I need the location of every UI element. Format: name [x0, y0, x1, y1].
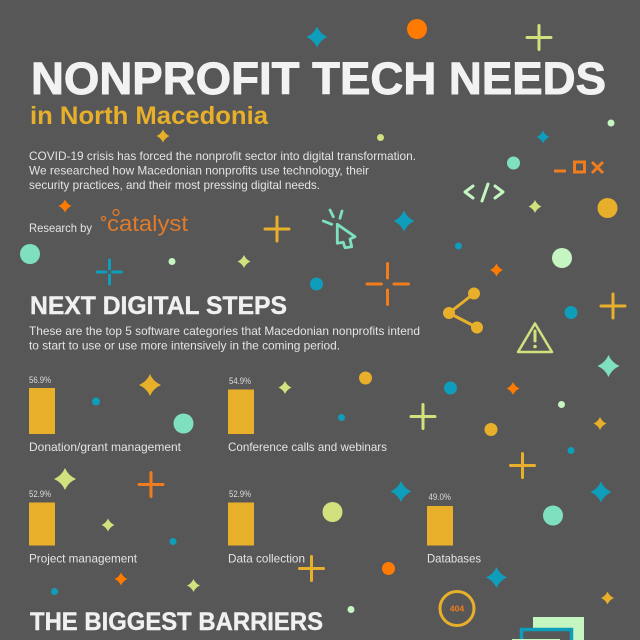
bar: project management: Project management: [29, 552, 138, 566]
icon: 404 badge: 404: [450, 604, 464, 614]
title: NONPROFIT TECH NEEDS: [31, 53, 606, 104]
bar: project management: [29, 489, 138, 566]
icon: browser windows: [512, 617, 584, 640]
bar: conference calls and webinars: 54.9%: [229, 376, 251, 386]
intro text: COVID-19 crisis has forced the nonprofit sector into digital transformation.: [29, 149, 416, 163]
intro text: security practices, and their most pressing digital needs.: [29, 178, 320, 192]
decorative plus crosses: [97, 26, 625, 580]
icon: window controls: [554, 162, 603, 173]
bar: conference calls and webinars: Conference calls and webinars: [228, 440, 387, 454]
bar: donation/grant management: 56.9%: [29, 375, 51, 385]
heading: the biggest barriers: THE BIGGEST BARRIERS: [30, 608, 323, 636]
icon: share: [444, 288, 482, 333]
logo: catalyst: catalyst: [107, 211, 188, 236]
decorative four-point stars: [54, 26, 620, 604]
bar: donation/grant management: [29, 375, 182, 454]
bar: databases: Databases: [427, 552, 481, 566]
bar chart: [29, 375, 481, 566]
bar: data collection: 52.9%: [229, 489, 251, 499]
icon: warning triangle: [518, 324, 552, 352]
bar: donation/grant management: Donation/grant management: [29, 440, 182, 454]
icon: 404 badge: [440, 592, 474, 626]
bar: conference calls and webinars: [228, 376, 387, 454]
bar: databases: [427, 492, 481, 566]
intro text: [29, 149, 416, 192]
research credit: Research by: [29, 221, 92, 235]
section description: [29, 324, 420, 352]
bar: data collection: [228, 489, 305, 566]
intro text: We researched how Macedonian nonprofits use technology, their: [29, 164, 369, 178]
bar: project management: 52.9%: [29, 489, 51, 499]
bar: databases: 49.0%: [428, 492, 451, 502]
icon: cursor click: [323, 210, 355, 248]
icon: code brackets: [465, 184, 503, 201]
section description: These are the top 5 software categories that Macedonian nonprofits intend: [29, 324, 420, 338]
heading: next digital steps: NEXT DIGITAL STEPS: [30, 292, 287, 320]
subtitle: in North Macedonia: [30, 102, 269, 130]
section description: to start to use or use more intensively in the coming period.: [29, 338, 340, 352]
bar: data collection: Data collection: [228, 552, 305, 566]
